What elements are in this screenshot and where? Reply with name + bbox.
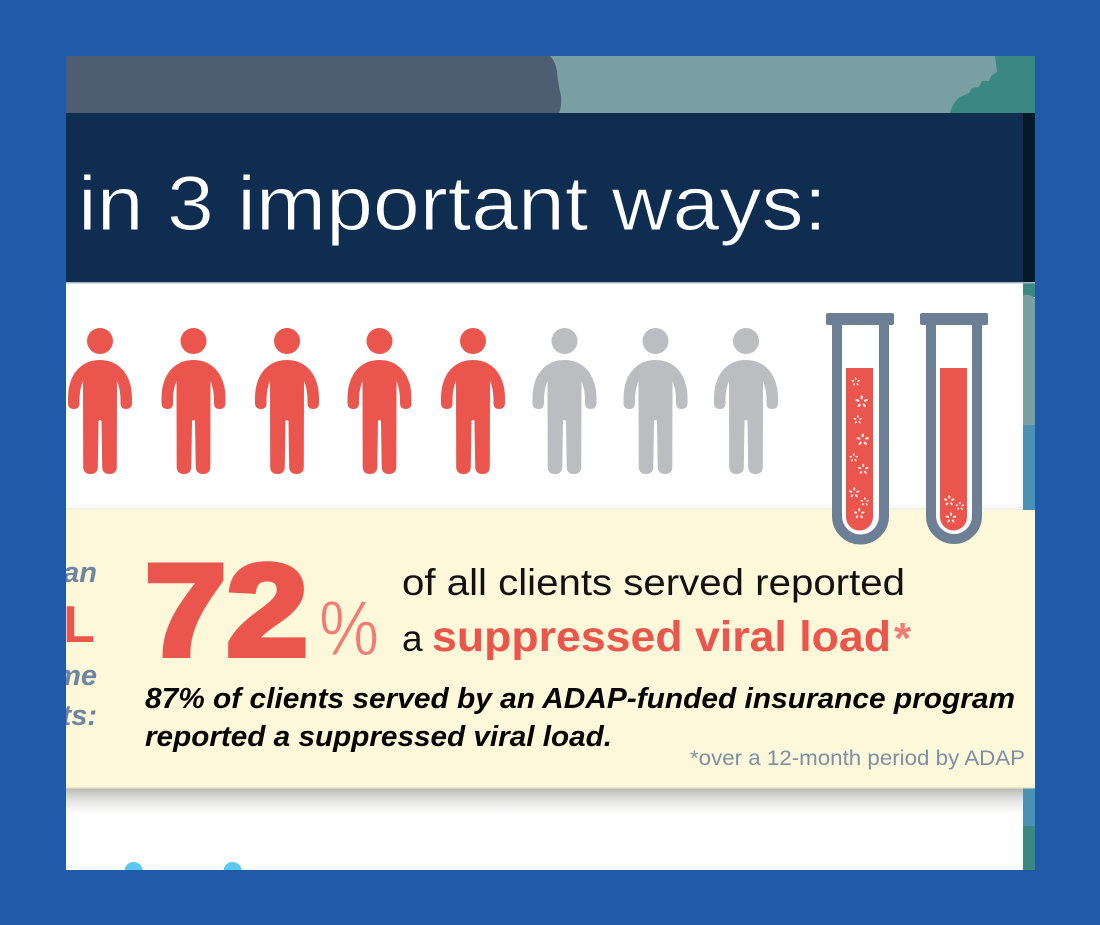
test tube: many viral particles: [826, 313, 894, 540]
supporting statement: reported a suppressed viral load.: [145, 721, 612, 753]
people pictogram: five red, three gray: [68, 328, 778, 474]
right edge strip: [1023, 283, 1035, 870]
top banner strip: [66, 56, 1035, 113]
big number 72%: 72: [145, 537, 308, 683]
infographic canvas: [66, 56, 1035, 870]
statement text: suppressed viral load: [432, 613, 891, 661]
cropped left text: L: [63, 596, 95, 654]
statement text: of all clients served reported: [402, 562, 905, 603]
supporting statement: 87% of clients served by an ADAP-funded insurance program: [145, 683, 1015, 715]
title band: [66, 113, 1035, 284]
cropped left text: me: [55, 660, 97, 692]
cropped blue dots at bottom edge: [124, 862, 244, 870]
statement text: *: [894, 614, 912, 663]
cropped left text: an: [63, 557, 97, 589]
big number 72%: %: [319, 584, 379, 672]
cropped left text: [66, 566, 96, 726]
white page background: [66, 284, 1035, 870]
cream stat panel: [55, 504, 1035, 814]
supporting statement: [145, 683, 1015, 753]
footnote: *over a 12-month period by ADAP: [690, 747, 1025, 770]
cropped left text: ts:: [62, 700, 97, 732]
statement text: a: [402, 618, 423, 659]
title text: in 3 important ways:: [78, 161, 827, 247]
big number 72%: [148, 561, 376, 658]
statement text: [402, 562, 912, 663]
test tube: few viral particles: [920, 313, 988, 539]
